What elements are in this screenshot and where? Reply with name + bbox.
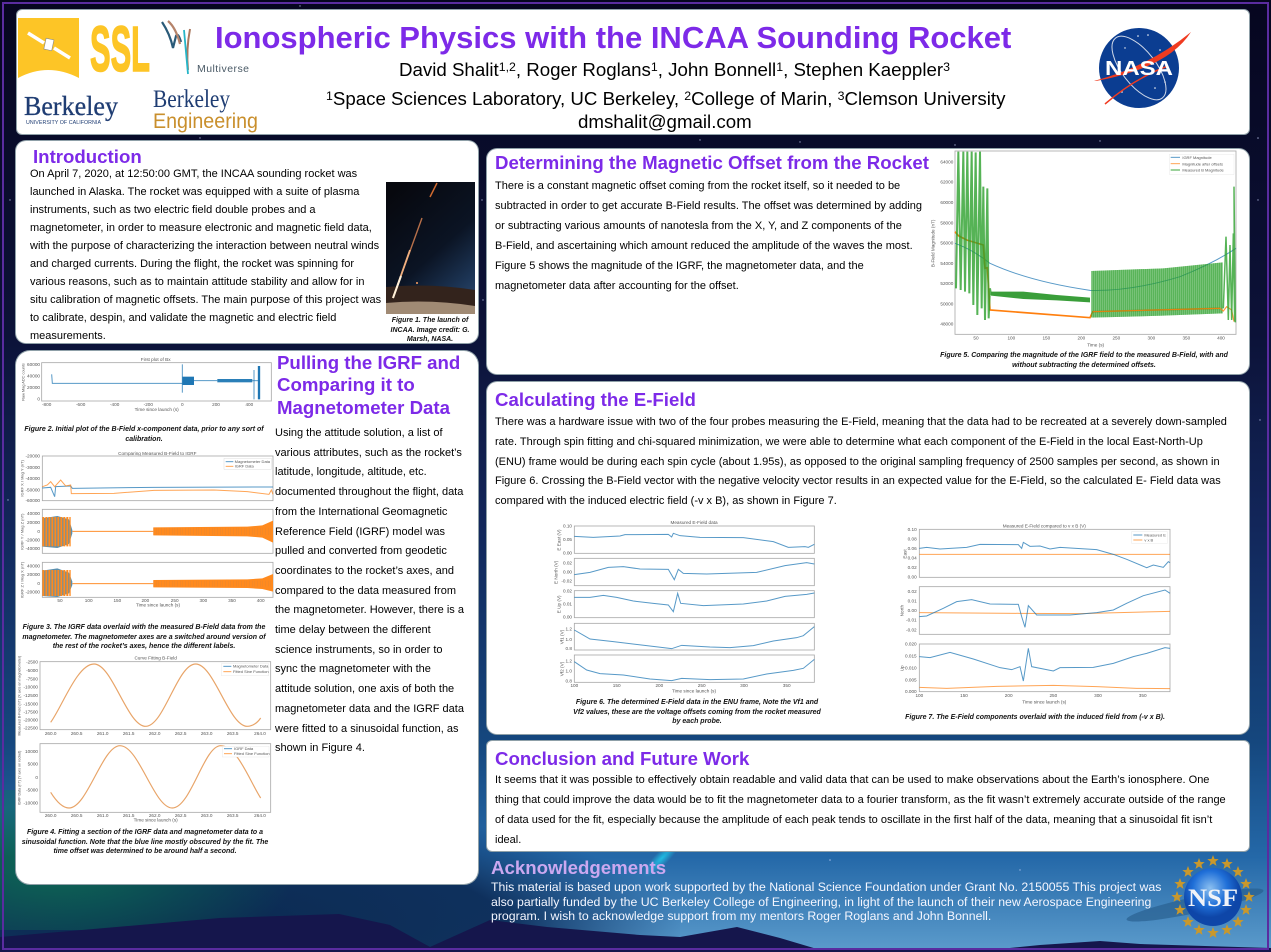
upper fit panel: -2500 xyxy=(26,660,38,665)
caption: figure 5: Figure 5. Comparing the magnitude of the IGRF field to the measured B-Field, with and xyxy=(940,352,1228,359)
figure 2: raw B-field x-component chart: First plot of Bx xyxy=(141,357,171,362)
figure 6: measured E-field chart: E Up (V) xyxy=(557,595,562,613)
figure 7: E-field vs induced field chart: North xyxy=(899,605,904,616)
figure 4: sinusoidal curve fits chart xyxy=(18,656,272,823)
conclusion text: of data used for the fit, especially because the amplitude of each peak tends to oscillate in the first half of the data, meaning that a sinusoidal fit isn’t xyxy=(495,814,1212,826)
logo: NSF xyxy=(1171,855,1255,938)
figure 6: measured E-field chart: 350 xyxy=(783,683,791,688)
figure 7: E-field vs induced field chart: 0.04 xyxy=(908,556,917,561)
panel 1: -50000 xyxy=(26,487,40,492)
caption: figure 6: Figure 6. The determined E-Field data in the ENU frame, Note the Vf1 and xyxy=(576,699,818,706)
figure 6: measured E-field chart: 0.02 xyxy=(563,588,572,593)
panel 3: 40000 xyxy=(27,564,40,569)
figure 7: E-field vs induced field chart: Measured E-Field compared to v x B (V) xyxy=(1003,523,1086,528)
caption: figure 7: Figure 7. The E-Field components overlaid with the induced field from (-v x B). xyxy=(905,714,1165,721)
figure 6: measured E-field chart: E North (V) xyxy=(553,560,558,584)
lower fit panel: 10000 xyxy=(25,749,38,754)
upper fit panel: 261.5 xyxy=(123,731,135,736)
caption: figure 3: the rest of the rocket’s axes, hence the different labels. xyxy=(53,643,235,650)
figure 7: E-field vs induced field chart: 0.02 xyxy=(908,589,917,594)
figure 6: measured E-field chart: 0.00 xyxy=(563,550,572,555)
caption: figure 5: without subtracting the determined offsets. xyxy=(1012,362,1156,368)
caption: figure 1: Figure 1. The launch of xyxy=(392,317,468,324)
caption: figure 3 xyxy=(22,624,266,650)
figure 2: raw B-field x-component chart: 200 xyxy=(212,402,220,407)
panel 1: IGRF Data xyxy=(235,464,255,469)
upper fit panel: 260.5 xyxy=(71,731,83,736)
figure 7: E-field vs induced field chart: Time since launch (s) xyxy=(1022,699,1067,704)
caption: figure 5 xyxy=(940,352,1228,368)
figure 5: B-field magnitude chart: Measured B Magnitude xyxy=(1182,168,1224,173)
conclusion text: It seems that it was possible to effectively obtain readable and valid data that can be used to make observations about the Earth’s ionosphere. One xyxy=(495,774,1209,786)
caption: figure 4: Figure 4. Fitting a section of the IGRF data and magnetometer data to a xyxy=(27,829,263,836)
figure 6: measured E-field chart: 1.0 xyxy=(566,637,572,642)
acknowledgements text: program. I wish to acknowledge support from my mentors Roger Roglans and John Bonnell. xyxy=(491,909,991,923)
caption: figure 3: Figure 3. The IGRF data overlaid with the measured B-Field data from the xyxy=(23,624,265,631)
figure 5: B-field magnitude chart: Time (s) xyxy=(1087,343,1105,348)
figure 7: E-field vs induced field chart: 350 xyxy=(1139,693,1147,698)
upper fit panel xyxy=(18,656,271,736)
figure 7: E-field vs induced field chart: 0.10 xyxy=(908,527,917,532)
caption: figure 4 xyxy=(22,828,268,855)
figure 5: B-field magnitude chart: Magnitude after offsets xyxy=(1182,161,1223,166)
calculating text: rate. Through spin fitting and chi-squared minimization, we were able to determine what each component of the E-Field in the local East-North-Up xyxy=(495,436,1203,448)
figure 6: measured E-field chart: 200 xyxy=(655,683,664,688)
figure 2: raw B-field x-component chart: -800 xyxy=(42,402,52,407)
panel 3: 50 xyxy=(57,598,63,603)
figure 5: B-field magnitude chart: 200 xyxy=(1077,335,1086,340)
figure 5: B-field magnitude chart: 64000 xyxy=(940,159,954,164)
figure 6: measured E-field chart: 1.0 xyxy=(566,668,572,673)
upper fit panel: -20000 xyxy=(24,718,38,723)
figure 6: measured E-field chart: Measured E-Field data xyxy=(670,520,718,525)
introduction text: and charged currents. During the flight, the rocket was spinning for xyxy=(30,258,354,270)
figure 7: E-field vs induced field chart: 0.005 xyxy=(905,677,917,682)
figure 2: raw B-field x-component chart: Time since launch (s) xyxy=(135,407,179,412)
panel 1: -60000 xyxy=(26,498,40,503)
lower fit panel: IGRF Data xyxy=(234,746,254,751)
upper fit panel: Magnetometer Data xyxy=(233,664,269,669)
lower fit panel: -10000 xyxy=(24,801,38,806)
figure 5: B-field magnitude chart: 52000 xyxy=(940,281,954,286)
calculating text: (ENU) frame would be during each spin cycle (about 1.95s), as opposed to the original sampling frequency of 2500 samples per second, as shown in xyxy=(495,456,1220,468)
figure 7: E-field vs induced field chart: 0.00 xyxy=(908,608,917,613)
introduction text: to calibrate, despin, and validate the magnetic and electric field xyxy=(30,312,336,324)
figure 7: E-field vs induced field chart xyxy=(899,523,1170,704)
email: dmshalit@gmail.com xyxy=(578,111,752,132)
panel 3: 150 xyxy=(113,598,122,603)
pulling the IGRF text: time delay between the different xyxy=(275,624,431,636)
panel 3: -20000 xyxy=(26,590,40,595)
figure 7: E-field vs induced field chart: 0.06 xyxy=(908,546,917,551)
upper fit panel: Measured B-Field (nT) (X axis on magnetometer) xyxy=(18,656,22,736)
panel 3: 200 xyxy=(141,598,150,603)
pulling the IGRF text: Reference Field (IGRF) model was xyxy=(275,526,445,538)
pulling the IGRF text: science instruments, so in order to xyxy=(275,644,443,656)
introduction text: launched in Alaska. The rocket was equipped with a suite of plasma xyxy=(30,186,359,198)
figure 2: raw B-field x-component chart: 20000 xyxy=(27,385,40,390)
pulling the IGRF text: pulled and converted from geodetic xyxy=(275,545,447,557)
introduction text: magnetometer, in order to measure electronic and magnetic field data, xyxy=(30,222,372,234)
upper fit panel: 261.0 xyxy=(97,731,109,736)
figure 6: measured E-field chart: 1.2 xyxy=(566,659,572,664)
figure 2: raw B-field x-component chart: -400 xyxy=(110,402,120,407)
calculating text xyxy=(495,416,1227,507)
pulling the IGRF text: from the International Geomagnetic xyxy=(275,506,447,518)
title: Ionospheric Physics with the INCAA Sounding Rocket xyxy=(215,20,1011,55)
caption: figure 2 xyxy=(24,426,264,442)
figure 5: B-field magnitude chart: 300 xyxy=(1147,335,1156,340)
panel 1: -30000 xyxy=(26,465,40,470)
panel 2: IGRF Y / Mag Z (nT) xyxy=(19,513,24,550)
panel 2: -40000 xyxy=(26,546,40,551)
logo: NASA xyxy=(1094,28,1191,108)
pulling the IGRF text: the magnetometer. However, there is a xyxy=(275,604,464,616)
figure 7: E-field vs induced field chart: 300 xyxy=(1094,693,1102,698)
figure 2: raw B-field x-component chart: 400 xyxy=(245,402,254,407)
figure 6: measured E-field chart: 0.01 xyxy=(563,602,572,607)
figure 5: B-field magnitude chart: 50000 xyxy=(940,301,954,306)
introduction text: with the purpose of characterizing the interaction between neutral winds xyxy=(30,240,379,252)
figure 3: IGRF vs magnetometer chart xyxy=(19,451,274,608)
panel 3: 250 xyxy=(171,598,179,603)
affiliations: 1Space Sciences Laboratory, UC Berkeley, 2College of Marin, 3Clemson University xyxy=(326,88,1005,109)
caption: figure 2: Figure 2. Initial plot of the B-Field x-component data, prior to any sort of xyxy=(24,426,264,433)
upper fit panel: -10000 xyxy=(24,685,38,690)
figure 5: B-field magnitude chart: B-Field Magnitude (nT) xyxy=(931,219,936,267)
heading: calculating the E-field: Calculating the E-Field xyxy=(495,389,696,410)
figure 6: measured E-field chart: Vf2 (V) xyxy=(559,661,564,676)
logo: Multiverse xyxy=(161,20,249,75)
lower fit panel: 260.0 xyxy=(45,813,57,818)
panel 1: -40000 xyxy=(26,476,40,481)
upper fit panel: -5000 xyxy=(26,668,38,673)
figure 6: measured E-field chart: 0.10 xyxy=(563,524,572,529)
panel: introduction xyxy=(16,141,478,343)
panel 1: Magnetometer Data xyxy=(235,459,271,464)
calculating text: Figure 6. Crossing the B-Field vector with the negative velocity vector results in an expected value for the E-Field, so the calculated E- Field data was xyxy=(495,475,1221,487)
figure 7: E-field vs induced field chart: Up xyxy=(899,665,904,671)
figure 7: E-field vs induced field chart: 0.01 xyxy=(908,598,917,603)
caption: figure 1 xyxy=(390,316,469,343)
figure 2: raw B-field x-component chart: 60000 xyxy=(27,362,40,367)
determining text xyxy=(495,180,922,292)
heading: pulling the IGRF xyxy=(277,352,460,418)
figure 6: measured E-field chart: 0.8 xyxy=(566,646,572,651)
figure 5: B-field magnitude chart: IGRF Magnitude xyxy=(1182,155,1212,160)
introduction text: measurements. xyxy=(30,330,106,342)
lower fit panel: 261.0 xyxy=(97,813,109,818)
logo: Berkeley Engineering xyxy=(153,86,258,133)
determining text: B-Field, and ascertaining which amount reduced the amplitude of the waves the most. xyxy=(495,240,913,252)
figure 5: B-field magnitude chart: 50 xyxy=(973,335,979,340)
introduction text: situ calibration of magnetic offsets. The main purpose of this project was xyxy=(30,294,381,306)
upper fit panel: 263.0 xyxy=(201,731,213,736)
caption: figure 6: Vf2 values, these are the voltage offsets coming from the rocket measured xyxy=(573,708,821,716)
figure 7: E-field vs induced field chart: 100 xyxy=(915,693,924,698)
panel 3: Time since launch (s) xyxy=(136,603,180,608)
figure 2: raw B-field x-component chart: 40000 xyxy=(27,374,40,379)
pulling the IGRF text: were fitted to a sinusoidal function, as xyxy=(275,723,458,735)
lower fit panel: 262.0 xyxy=(149,813,161,818)
panel: conclusion and future work xyxy=(487,741,1249,851)
logo: Multiverse: Multiverse xyxy=(197,63,249,75)
figure 7: E-field vs induced field chart: East xyxy=(903,549,908,559)
heading: pulling the IGRF: Magnetometer Data xyxy=(277,397,450,418)
upper fit panel: Fitted Sine Function xyxy=(233,669,269,674)
figure 2: raw B-field x-component chart: Raw Mag ADC counts xyxy=(22,363,26,401)
panel 2: 40000 xyxy=(27,511,40,516)
determining text: magnetometer data after accounting for the offset. xyxy=(495,280,739,292)
caption: figure 4: time offset was determined to be around half a second. xyxy=(53,848,237,855)
figure 6: measured E-field chart: 100 xyxy=(570,683,579,688)
figure 7: E-field vs induced field chart: -0.01 xyxy=(906,618,917,623)
figure 5: B-field magnitude chart: 56000 xyxy=(940,241,954,246)
panel: determining the magnetic offset xyxy=(487,149,1249,374)
figure 1: rocket launch photograph xyxy=(386,182,475,314)
determining text: Figure 5 shows the magnitude of the IGRF, the magnetometer data, and the xyxy=(495,260,864,272)
pulling the IGRF text: magnetometer data and the IGRF data xyxy=(275,703,464,715)
heading: acknowledgements: Acknowledgements xyxy=(491,857,666,878)
lower fit panel: -5000 xyxy=(26,788,38,793)
panel 3: 300 xyxy=(199,598,208,603)
calculating text: There was a hardware issue with two of the four probes measuring the E-Field, meaning that the data had to be recreated at a severely down-sampled xyxy=(495,416,1227,428)
lower fit panel xyxy=(18,744,271,823)
figure 5: B-field magnitude chart: 60000 xyxy=(940,200,954,205)
figure 7: E-field vs induced field chart: 200 xyxy=(1005,693,1013,698)
lower fit panel: 262.5 xyxy=(175,813,187,818)
lower fit panel: 263.0 xyxy=(201,813,213,818)
figure 6: measured E-field chart: 250 xyxy=(698,683,706,688)
figure 3: IGRF vs magnetometer chart: Comparing Measured B-Field to IGRF xyxy=(118,451,197,456)
figure 6: measured E-field chart: Time since launch (s) xyxy=(672,688,716,693)
figure 7: E-field vs induced field chart: 250 xyxy=(1049,693,1058,698)
logo: SSL xyxy=(18,13,150,85)
figure 2: raw B-field x-component chart xyxy=(22,357,272,412)
upper fit panel: -22500 xyxy=(24,726,38,731)
pulling the IGRF text: shown in Figure 4. xyxy=(275,742,365,754)
upper fit panel: -7500 xyxy=(26,677,38,682)
figure 6: measured E-field chart: E East (V) xyxy=(557,529,562,551)
pulling the IGRF text: coordinates to the rocket’s axes, and xyxy=(275,565,454,577)
pulling the IGRF text: documented throughout the flight, data xyxy=(275,486,463,498)
heading: pulling the IGRF: Comparing it to xyxy=(277,374,415,395)
pulling the IGRF text: latitude, longitude, altitude, etc. xyxy=(275,466,427,478)
figure 5: B-field magnitude chart: 54000 xyxy=(940,261,954,266)
panel: header xyxy=(17,10,1249,134)
lower fit panel: 260.5 xyxy=(71,813,83,818)
figure 2: raw B-field x-component chart: -200 xyxy=(144,402,153,407)
caption: figure 1: Marsh, NASA. xyxy=(407,336,453,343)
caption: figure 4: sinusoidal function. Note that the blue line mostly obscured by the fit. The xyxy=(22,838,268,846)
introduction text: On April 7, 2020, at 12:50:00 GMT, the INCAA sounding rocket was xyxy=(30,168,357,180)
upper fit panel: 263.5 xyxy=(227,731,239,736)
figure 7: E-field vs induced field chart: -0.02 xyxy=(906,627,917,632)
figure 5: B-field magnitude chart: 400 xyxy=(1217,335,1225,340)
authors: David Shalit1,2, Roger Roglans1, John Bonnell1, Stephen Kaeppler3 xyxy=(399,59,950,80)
figure 6: measured E-field chart: 0.05 xyxy=(563,537,572,542)
figure 5: B-field magnitude chart: 62000 xyxy=(940,180,954,185)
lower fit panel: 263.5 xyxy=(227,813,239,818)
figure 5: B-field magnitude chart: 100 xyxy=(1007,335,1016,340)
panel 3: IGRF Z / Mag X (nT) xyxy=(19,561,24,598)
figure 5: B-field magnitude chart: 150 xyxy=(1042,335,1051,340)
figure 6: measured E-field chart: 0.8 xyxy=(566,678,572,683)
panel 1 xyxy=(19,454,273,503)
figure 7: E-field vs induced field chart: 0.00 xyxy=(908,575,917,580)
figure 7: E-field vs induced field chart: Measured E xyxy=(1144,532,1166,537)
figure 7: E-field vs induced field chart: 150 xyxy=(960,693,968,698)
upper fit panel: 264.0 xyxy=(254,731,266,736)
figure 6: measured E-field chart: 0.02 xyxy=(563,560,572,565)
figure 6: measured E-field chart: 1.2 xyxy=(566,627,572,632)
figure 2: raw B-field x-component chart: 0 xyxy=(181,402,184,407)
acknowledgements text xyxy=(491,880,1161,923)
panel 1: IGRF X / Mag Y (nT) xyxy=(19,459,24,497)
panel 3: 400 xyxy=(257,598,265,603)
figure 7: E-field vs induced field chart: 0.02 xyxy=(908,565,917,570)
figure 5: B-field magnitude chart: 58000 xyxy=(940,220,954,225)
lower fit panel: 0 xyxy=(35,775,38,780)
figure 6: measured E-field chart xyxy=(553,520,815,694)
heading: determining the magnetic offset: Determining the Magnetic Offset from the Rocket xyxy=(495,152,929,173)
pulling the IGRF text: compared to the data measured from xyxy=(275,585,456,597)
panel 1: -20000 xyxy=(26,454,40,459)
caption: figure 3: magnetometer. The magnetometer axes are a switched around version of xyxy=(22,634,266,640)
figure 7: E-field vs induced field chart: 0.020 xyxy=(905,642,917,647)
lower fit panel: Time since launch (s) xyxy=(134,818,178,823)
heading: conclusion: Conclusion and Future Work xyxy=(495,748,749,769)
panel 2: 20000 xyxy=(27,520,40,525)
upper fit panel: -17500 xyxy=(24,710,38,715)
panel: calculating the E-field xyxy=(487,382,1249,734)
acknowledgements text: This material is based upon work supported by the National Science Foundation under Grant No. 2150055 This project was xyxy=(491,880,1161,894)
figure 7: E-field vs induced field chart: v x B xyxy=(1144,537,1154,542)
upper fit panel: 262.0 xyxy=(149,731,161,736)
caption: figure 1: INCAA. Image credit: G. xyxy=(391,326,469,334)
pulling the IGRF text: sync the magnetometer with the xyxy=(275,663,431,675)
figure 7: E-field vs induced field chart: 0.015 xyxy=(905,653,917,658)
upper fit panel: 262.5 xyxy=(175,731,187,736)
logo: SSL: SSL xyxy=(90,13,150,85)
introduction text: various reasons, such as to maintain attitude stability and allow for in xyxy=(30,276,364,288)
figure 7: E-field vs induced field chart: 0.08 xyxy=(908,537,917,542)
panel 3: 20000 xyxy=(27,572,40,577)
figure 4: sinusoidal curve fits chart: Curve Fitting B-Field xyxy=(134,656,177,661)
pulling the IGRF text: various attributes, such as the rocket’s xyxy=(275,447,462,459)
logo: Berkeley Engineering: Berkeley xyxy=(153,86,230,113)
upper fit panel: -12500 xyxy=(24,693,38,698)
lower fit panel: IGRF Data (nT) (Y axis on rocket) xyxy=(18,751,22,806)
introduction text: instruments, such as two electric field double probes and a xyxy=(30,204,316,216)
logo: NSF: NSF xyxy=(1188,885,1238,912)
introduction text xyxy=(30,168,381,342)
figure 7: E-field vs induced field chart: 0.000 xyxy=(905,689,917,694)
logo: UC Berkeley: UNIVERSITY OF CALIFORNIA xyxy=(26,120,101,126)
panel 2: 0 xyxy=(37,529,40,534)
figure 5: B-field magnitude chart: 48000 xyxy=(940,322,954,327)
figure 5: B-field magnitude chart: 350 xyxy=(1182,335,1191,340)
panel 2 xyxy=(19,509,273,553)
figure 6: measured E-field chart: 300 xyxy=(740,683,748,688)
lower fit panel: Fitted Sine Function xyxy=(234,751,270,756)
caption: figure 6: by each probe. xyxy=(672,718,722,725)
figure 6: measured E-field chart: 0.00 xyxy=(563,614,572,619)
panel 3: 350 xyxy=(228,598,236,603)
caption: figure 2: calibration. xyxy=(125,436,163,442)
panel 2: -20000 xyxy=(26,537,40,542)
determining text: There is a constant magnetic offset coming from the rocket itself, so it needed to be xyxy=(495,180,900,192)
figure 2: raw B-field x-component chart: -600 xyxy=(76,402,86,407)
panel 3: 0 xyxy=(37,581,40,586)
conclusion text: thing that could improve the data would be to fit the magnetometer data to a fourier transform, as the fit wasn’t extremely accurate outside of the range xyxy=(495,794,1226,806)
figure 7: E-field vs induced field chart: 0.010 xyxy=(905,665,917,670)
pulling the IGRF text: attitude solution, one axis of both the xyxy=(275,683,454,695)
upper fit panel: 260.0 xyxy=(45,731,57,736)
panel: pulling the IGRF xyxy=(16,351,478,884)
lower fit panel: 5000 xyxy=(28,762,38,767)
caption: figure 6 xyxy=(573,698,821,725)
lower fit panel: 261.5 xyxy=(123,813,135,818)
figure 5: B-field magnitude chart: 250 xyxy=(1112,335,1121,340)
logo: NASA: NASA xyxy=(1105,58,1173,80)
calculating text: compared with the induced electric field (-v x B), as shown in Figure 7. xyxy=(495,495,837,507)
figure 6: measured E-field chart: Vf1 (V) xyxy=(559,629,564,644)
determining text: subtracted in order to get accurate B-Field results. The offset was determined by adding xyxy=(495,200,922,212)
pulling the IGRF text xyxy=(275,427,464,754)
logo: Berkeley Engineering: Engineering xyxy=(153,110,258,133)
figure 2: raw B-field x-component chart: 0 xyxy=(37,397,40,402)
conclusion text: ideal. xyxy=(495,834,521,846)
figure 6: measured E-field chart: 150 xyxy=(613,683,621,688)
logo: UC Berkeley: Berkeley xyxy=(24,91,118,121)
figure 6: measured E-field chart: -0.02 xyxy=(561,578,572,583)
acknowledgements text: also partially funded by the UC Berkeley College of Engineering, in light of the launch of their new Aerospace Engineering xyxy=(491,895,1151,909)
figure 6: measured E-field chart: 0.00 xyxy=(563,570,572,575)
lower fit panel: 264.0 xyxy=(254,813,266,818)
determining text: or subtracting various amounts of nanotesla from the X, Y, and Z components of the xyxy=(495,220,902,232)
conclusion text xyxy=(495,774,1226,846)
panel 3: 100 xyxy=(85,598,93,603)
heading: introduction: Introduction xyxy=(33,146,142,167)
figure 5: B-field magnitude chart xyxy=(931,150,1236,348)
upper fit panel: -15000 xyxy=(24,702,38,707)
panel 3 xyxy=(19,561,273,608)
heading: pulling the IGRF: Pulling the IGRF and xyxy=(277,352,460,373)
pulling the IGRF text: Using the attitude solution, a list of xyxy=(275,427,443,439)
